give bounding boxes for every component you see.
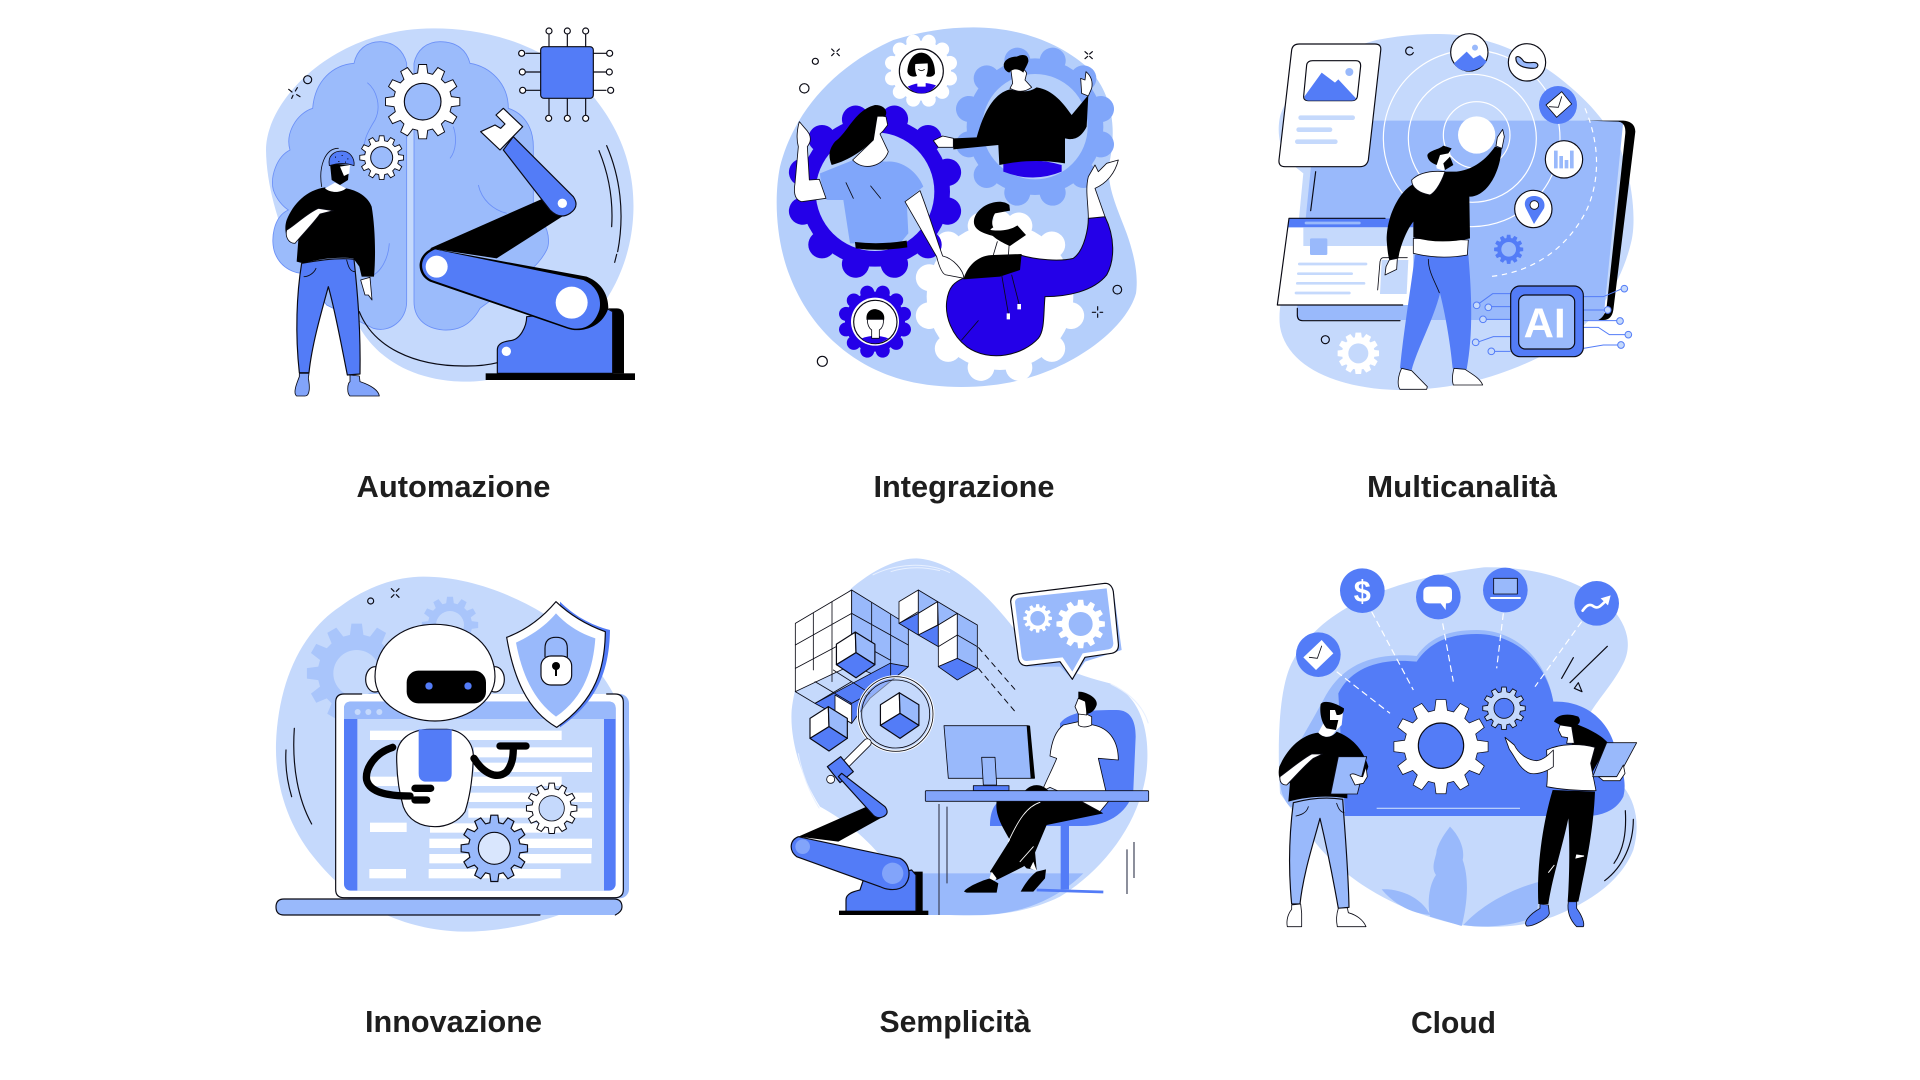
cloud front (1338, 634, 1625, 816)
panel: Cloud illustration (1279, 567, 1637, 927)
heading: Integrazione: Integrazione (874, 469, 1054, 504)
cable (359, 312, 497, 366)
background blob (276, 577, 630, 932)
robot base bar (486, 373, 635, 380)
bearded man (946, 160, 1118, 356)
background blob (791, 558, 1147, 915)
icon: shield with padlock (507, 602, 610, 727)
desk with monitor (925, 726, 1149, 915)
floating cubes (810, 632, 875, 751)
dashed connectors (1337, 612, 1582, 713)
icon: woman avatar (899, 49, 943, 93)
signal rings (1383, 50, 1597, 277)
woman at left (794, 105, 964, 278)
robot (366, 624, 526, 827)
panel: Integrazione illustration (777, 27, 1137, 387)
speech bubble with gears (1011, 583, 1122, 679)
background gears (307, 597, 478, 723)
man with tablet (1279, 702, 1368, 927)
floor (917, 873, 1083, 915)
background blob (266, 28, 633, 382)
gears (1338, 235, 1523, 373)
circuit traces (1472, 285, 1632, 355)
card: browser window (1277, 218, 1413, 305)
icon: chat (1416, 575, 1461, 619)
man at top right (933, 55, 1092, 177)
large gear (386, 65, 460, 139)
panel: Innovazione illustration (276, 577, 630, 932)
small gear (1483, 687, 1525, 730)
magnifier (827, 677, 933, 783)
person (285, 148, 379, 396)
heading: Multicanalità: Multicanalità (1367, 469, 1558, 504)
icon: envelope (1296, 632, 1341, 677)
ground line (1377, 807, 1520, 810)
tablet outline (1297, 172, 1400, 321)
heading: Semplicità: Semplicità (880, 1004, 1031, 1039)
person (1378, 129, 1504, 389)
laptop base (276, 899, 622, 915)
icon circles (1451, 34, 1583, 228)
motion lines (599, 146, 621, 262)
chair (990, 710, 1136, 892)
icon: sparkle and dot (289, 76, 312, 98)
icon: trend (1574, 581, 1619, 626)
AI chip (1511, 286, 1583, 357)
dashed projection lines (978, 647, 1016, 713)
heading: Automazione: Automazione (356, 469, 550, 504)
small gear (360, 136, 404, 180)
background blob (1279, 34, 1634, 390)
icon: dollar: $ (1354, 574, 1371, 608)
leaves (1382, 827, 1540, 927)
laptop (336, 694, 629, 898)
small decor circles (800, 49, 1122, 366)
icon: dollar (1340, 568, 1385, 613)
icon: microchip (519, 28, 614, 121)
panel: Multicanalità illustration (1277, 34, 1635, 390)
gears on screen (461, 783, 577, 881)
woman with tablet (1505, 715, 1637, 927)
AI label: AI (1524, 300, 1566, 346)
tablet black edge (1585, 121, 1635, 320)
decor circles (1321, 47, 1413, 344)
background blob (777, 27, 1137, 387)
panel: Automazione illustration (266, 28, 635, 396)
decor (286, 589, 399, 824)
robot arm (420, 108, 624, 373)
robot arm (791, 773, 928, 915)
heading: Innovazione: Innovazione (365, 1004, 542, 1039)
tablet screen (1297, 121, 1623, 320)
icon: man avatar (854, 300, 897, 344)
gears (783, 34, 1119, 386)
heading: Cloud: Cloud (1411, 1005, 1496, 1040)
motion marks (1562, 646, 1633, 881)
cloud back (1280, 630, 1553, 816)
background blob (1279, 567, 1637, 927)
brain (272, 42, 549, 330)
cube wall (795, 590, 908, 723)
person (964, 692, 1118, 893)
cube stack at right (899, 590, 977, 680)
card: image post (1279, 44, 1381, 167)
highlights (798, 565, 1148, 808)
large gear (1394, 700, 1488, 794)
icon: laptop (1483, 568, 1528, 612)
panel: Semplicità illustration (791, 558, 1149, 915)
